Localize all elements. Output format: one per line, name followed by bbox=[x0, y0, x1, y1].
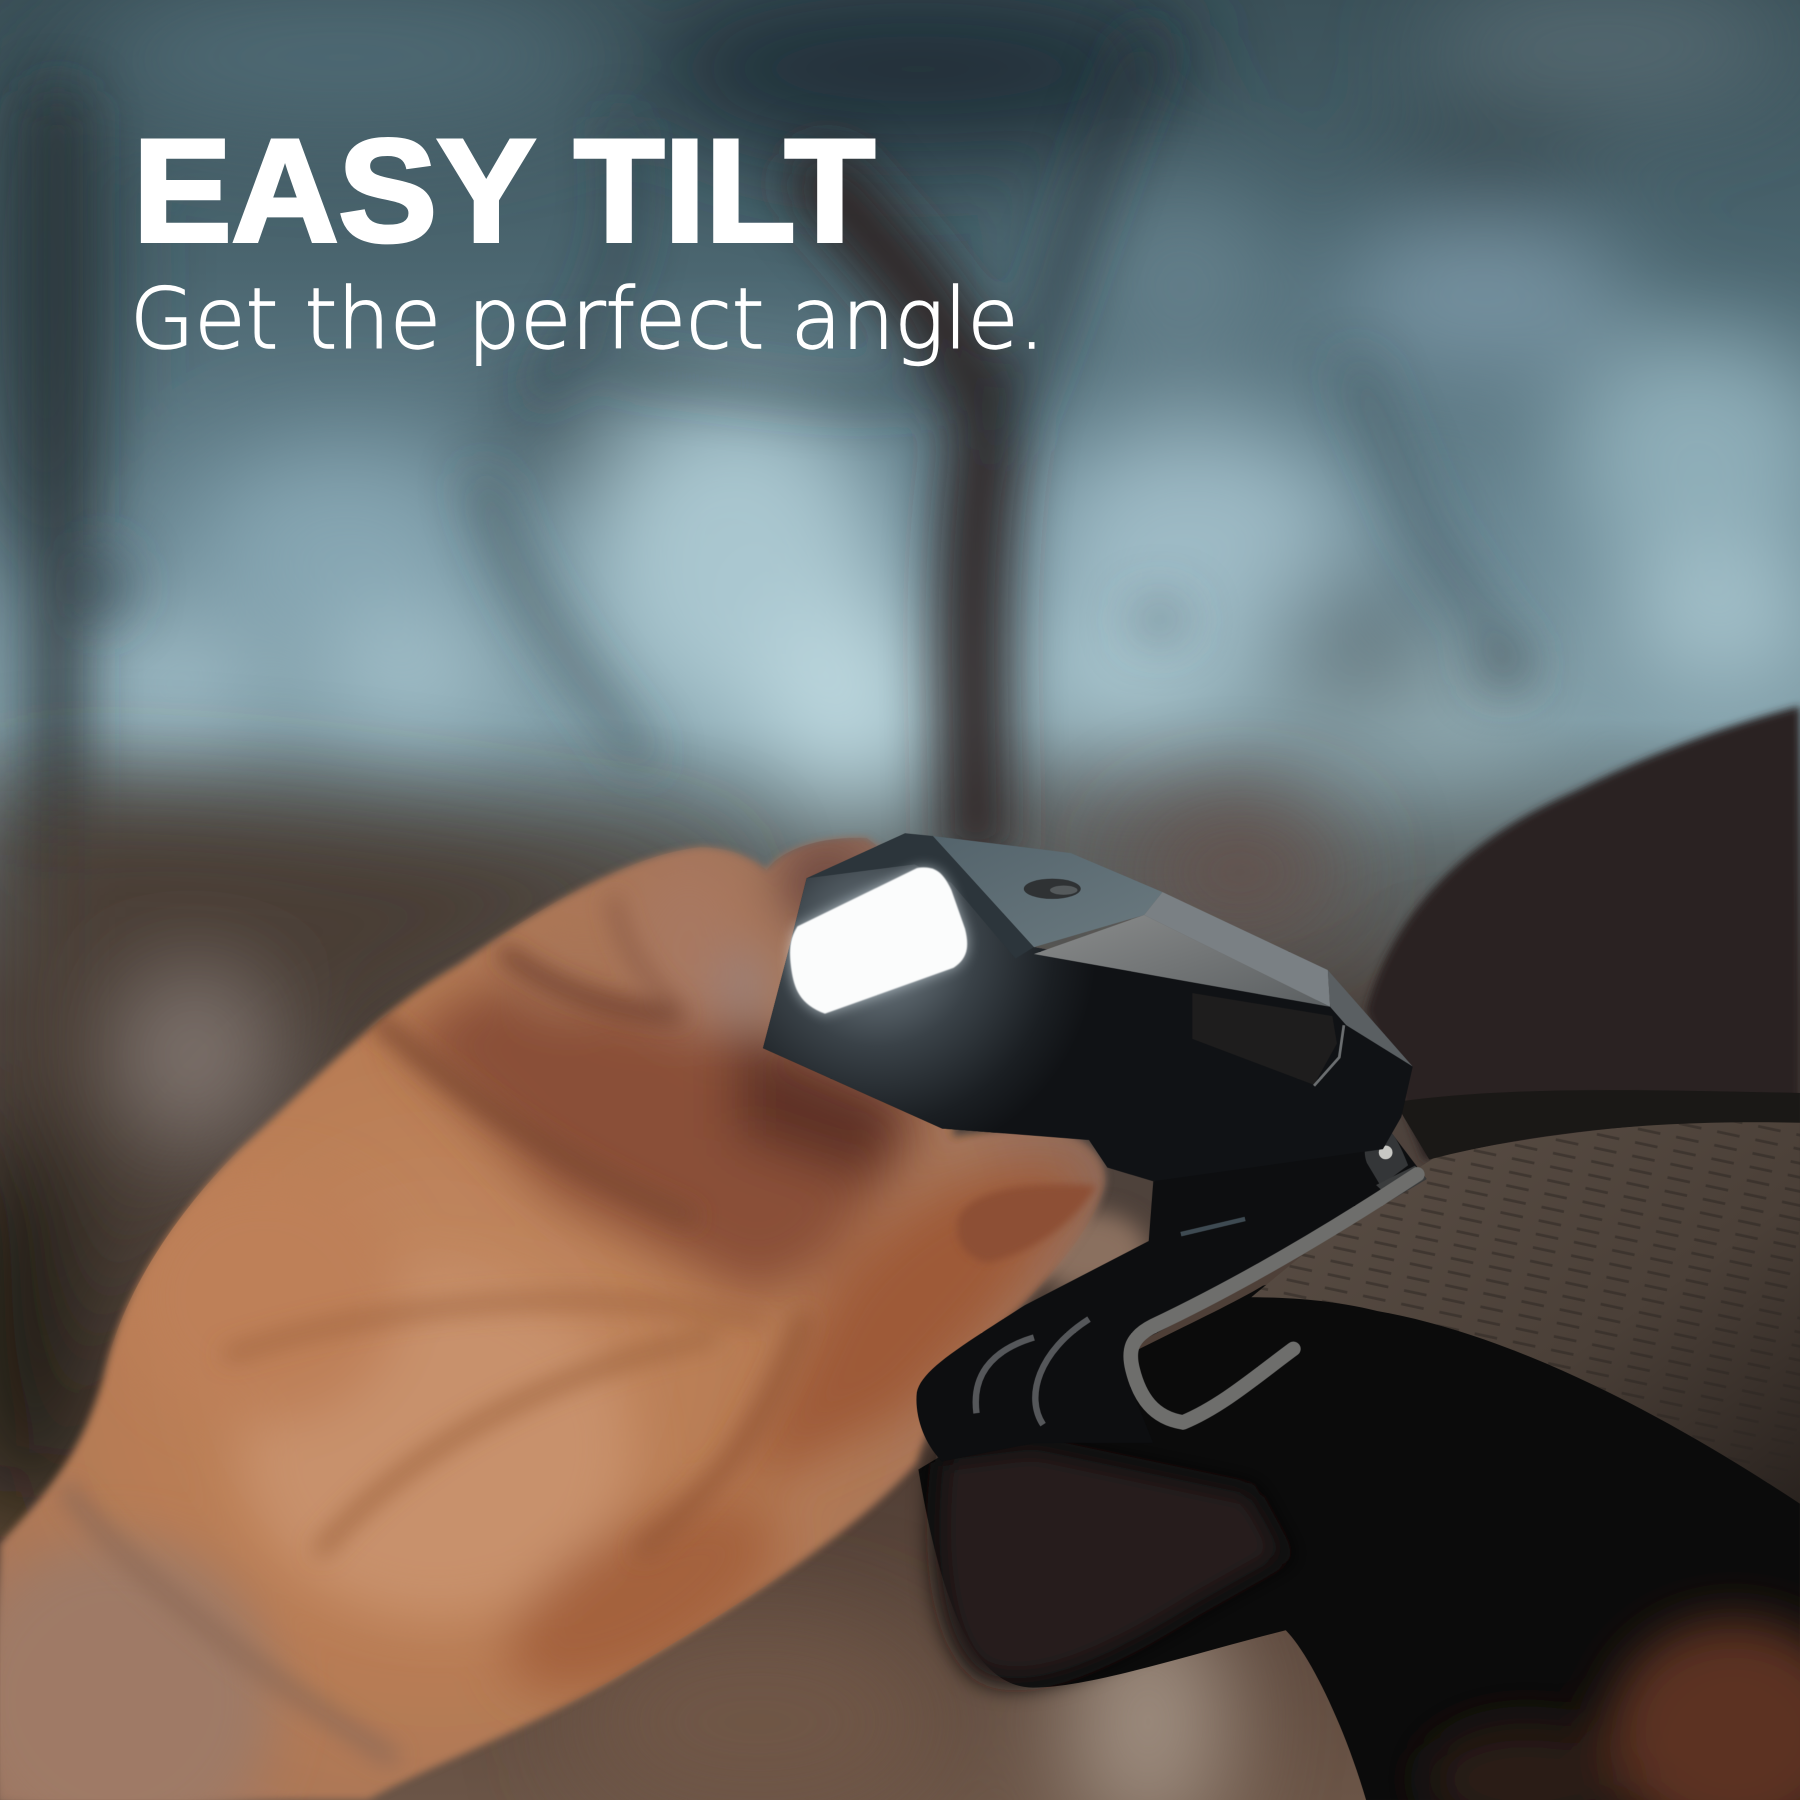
thumbnail bbox=[957, 1184, 1096, 1263]
headlamp side panel bbox=[1192, 993, 1337, 1085]
hand silhouette bbox=[0, 838, 1105, 1800]
headlamp lens glow bbox=[790, 867, 967, 1014]
hand holding the headlamp bbox=[0, 838, 1105, 1800]
headlamp clip arm bbox=[916, 1122, 1427, 1461]
cap crown bbox=[1366, 706, 1800, 1159]
background seen between thumb and clip bbox=[1033, 1211, 1148, 1292]
headlamp top plates bbox=[807, 833, 1413, 1066]
heading: EASY TILT bbox=[133, 109, 875, 272]
adjuster strap loop bbox=[937, 1446, 1286, 1681]
headlamp lens bbox=[790, 867, 967, 1014]
cap brim with mesh texture bbox=[1251, 1119, 1800, 1504]
cap band bbox=[1395, 1090, 1800, 1159]
clip-on headlamp bbox=[762, 833, 1426, 1460]
skin visible below cap bbox=[1424, 1619, 1800, 1800]
subheading: Get the perfect angle. bbox=[130, 270, 1045, 368]
headlamp body glow bbox=[763, 864, 1070, 1133]
hand shading and creases bbox=[0, 838, 1096, 1800]
headlamp lower body bbox=[763, 833, 1413, 1181]
baseball cap bbox=[918, 706, 1800, 1800]
cap shadow: underside of brim and face bbox=[918, 1148, 1800, 1800]
